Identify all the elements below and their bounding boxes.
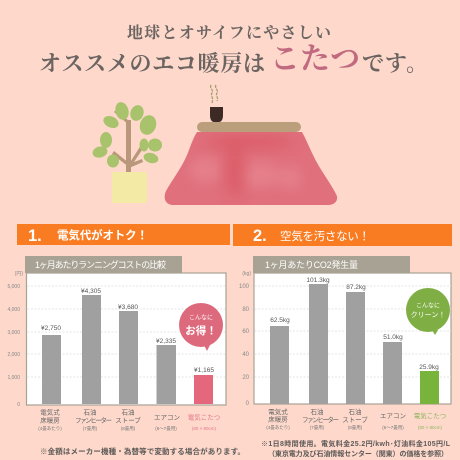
chart: monthly CO2: 62.5kg [270, 317, 290, 324]
axis labels [266, 407, 446, 431]
footnote: calculation basis: ※1日8時間使用。電気料金25.2円/kwh･灯油料金105円/L [261, 439, 451, 448]
axis labels: 石油 [122, 408, 134, 416]
callout: good value: お得！ [185, 324, 217, 337]
chart: monthly running cost: ¥2,750 [41, 325, 61, 332]
chart: monthly CO2: (kg) [242, 271, 251, 277]
chart: monthly CO2: 20 [242, 375, 250, 381]
title: です。 [362, 51, 428, 76]
callout: good value: こんなに [189, 314, 213, 322]
chart: monthly running cost: 4,000 [7, 307, 20, 313]
chart: monthly CO2: 0 [246, 401, 250, 407]
callout: clean [406, 288, 450, 335]
chart: monthly running cost: 3,000 [7, 330, 20, 336]
title: 地球とオサイフにやさしい [127, 23, 331, 42]
chart: monthly CO2: 87.2kg [346, 284, 366, 291]
footnote: calculation basis: （東京電力及び石油情報センター（関東）の価格を参照） [268, 449, 448, 458]
axis labels: ストーブ [342, 415, 368, 424]
chart: monthly running cost: ¥1,165 [194, 367, 214, 374]
chart: monthly running cost: 0 [17, 402, 20, 408]
chart: monthly CO2: 101.3kg [306, 277, 330, 284]
chart: monthly running cost: 5,000 [7, 284, 20, 290]
footnote: calculation basis [261, 439, 451, 458]
axis labels: (8畳用) [121, 426, 136, 432]
axis labels: (7畳用) [83, 426, 98, 432]
chart tab [253, 256, 410, 273]
chart: monthly CO2: 100 [239, 284, 250, 290]
heading: section 1: 1. [28, 227, 42, 245]
title: オススメのエコ暖房は [39, 51, 265, 76]
chart tab [25, 256, 182, 273]
axis labels: (80 × 80cm) [192, 426, 217, 431]
chart: monthly CO2: 40 [242, 352, 250, 358]
axis labels: ファンヒーター [302, 415, 339, 424]
bars [42, 295, 213, 404]
axis labels: 床暖房 [40, 416, 60, 424]
axis labels: (6〜7畳用) [382, 425, 404, 431]
callout: clean: クリーン！ [411, 311, 445, 319]
icon: potted plant [91, 101, 162, 203]
axis labels: 石油 [84, 408, 96, 416]
chart: monthly running cost: ¥3,680 [118, 304, 138, 311]
title [39, 23, 428, 76]
icon: kotatsu [165, 122, 337, 205]
axis labels: 電気式 [268, 407, 288, 416]
chart: monthly CO2: 51.0kg [383, 334, 403, 341]
heading: section 2 [233, 224, 452, 246]
title: こたつ [270, 43, 360, 76]
chart tab: 1ヶ月あたりランニングコストの比較 [35, 259, 166, 270]
axis labels: 石油 [348, 407, 362, 416]
chart tab: 1ヶ月あたりCO2発生量 [265, 259, 358, 270]
chart: monthly running cost: ¥4,305 [81, 288, 101, 295]
axis labels: (80 × 80cm) [418, 425, 443, 430]
callout: good value [179, 303, 223, 351]
axis labels: 電気式 [40, 408, 60, 416]
heading: section 1: 電気代がオトク！ [57, 228, 148, 242]
chart: monthly running cost: 1,000 [7, 375, 20, 381]
heading: section 2: 2. [253, 227, 267, 245]
axis labels: ファンヒーター [75, 416, 112, 424]
bars [270, 284, 439, 404]
axis labels: (4畳あたり) [38, 426, 62, 432]
chart: monthly CO2: 80 [242, 307, 250, 313]
axis labels: エアコン [380, 412, 406, 420]
axis labels: (7畳用) [310, 425, 325, 431]
chart: monthly running cost: (円) [15, 271, 23, 277]
axis labels [38, 408, 220, 432]
axis labels: (8畳用) [348, 425, 363, 431]
chart: monthly CO2: 25.9kg [419, 364, 439, 371]
axis labels: (4畳あたり) [266, 425, 290, 431]
axis labels: エアコン [154, 414, 180, 422]
axis labels: ストーブ [115, 416, 141, 424]
heading: section 2: 空気を汚さない！ [280, 229, 370, 243]
chart: monthly CO2: 60 [242, 329, 250, 335]
callout: clean: こんなに [416, 302, 440, 310]
axis labels: (6〜7畳用) [155, 426, 177, 432]
footnote: price variation: ※金額はメーカー機種・為替等で変動する場合があります。 [40, 446, 245, 456]
chart: monthly running cost: 2,000 [7, 352, 20, 358]
icon: tea cup with steam [210, 85, 223, 122]
axis labels: 床暖房 [268, 416, 288, 424]
axis labels: 電気こたつ [188, 412, 220, 422]
axis labels: 電気こたつ [414, 411, 446, 420]
chart: monthly running cost [7, 256, 226, 432]
chart: monthly running cost: ¥2,335 [156, 338, 176, 345]
chart: monthly CO2 [239, 256, 451, 431]
heading: section 1 [17, 224, 230, 245]
axis labels: 石油 [310, 407, 324, 416]
